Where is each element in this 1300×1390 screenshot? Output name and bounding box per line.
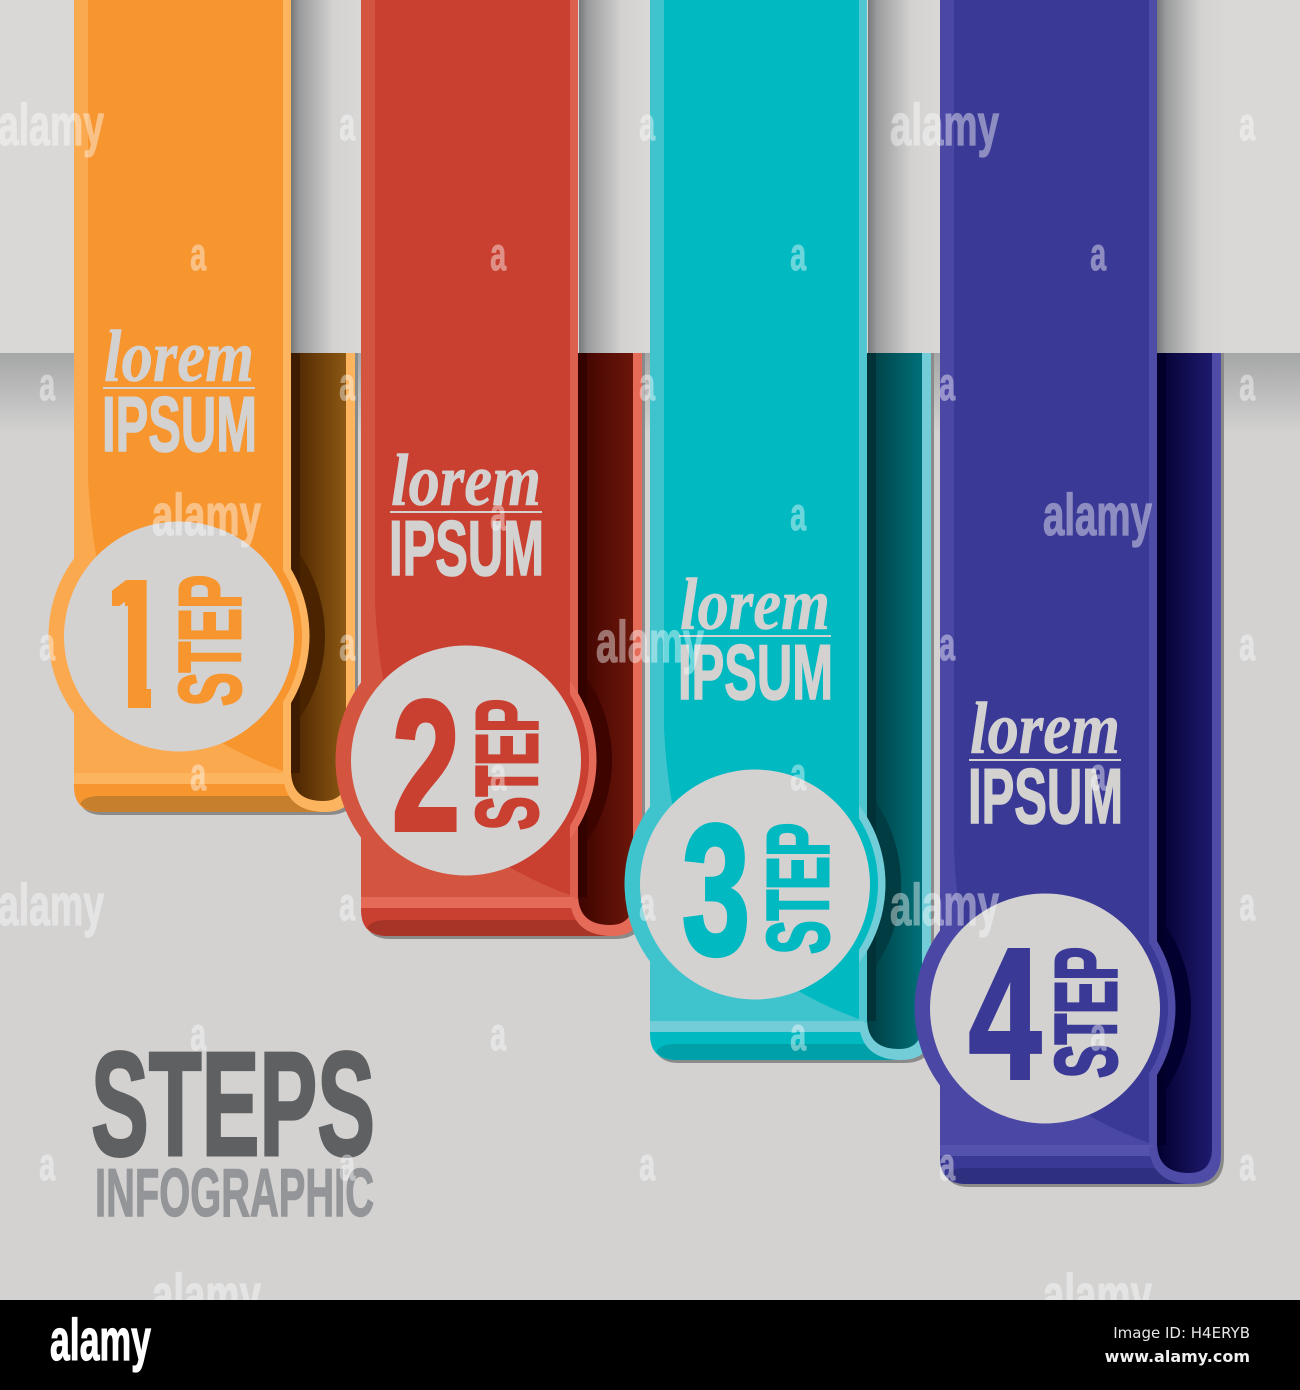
label: lorem ipsum 1: IPSUM: [102, 380, 257, 468]
footer bar: alamy: [50, 1308, 151, 1373]
watermark: alamy pattern: a: [1239, 99, 1256, 151]
watermark: alamy pattern: a: [639, 879, 656, 931]
watermark: alamy pattern: alamy: [596, 610, 704, 675]
watermark: alamy pattern: a: [639, 99, 656, 151]
badge: step 3: 3: [682, 786, 750, 994]
label: lorem ipsum 1: [102, 316, 257, 468]
watermark: alamy pattern: a: [1090, 749, 1107, 801]
badge: step 3: [640, 770, 870, 1000]
watermark: alamy pattern: a: [190, 229, 207, 281]
watermark: alamy pattern: a: [39, 359, 56, 411]
panel: step 4 ribbon: [899, 0, 1224, 1187]
watermark: alamy pattern: a: [639, 359, 656, 411]
label: lorem ipsum 4: IPSUM: [968, 752, 1123, 840]
watermark: alamy pattern: a: [639, 1139, 656, 1191]
watermark: alamy pattern: a: [790, 229, 807, 281]
watermark: alamy pattern: alamy: [1043, 483, 1152, 548]
badge: step 2: 2: [392, 662, 460, 870]
watermark: alamy pattern: a: [790, 749, 807, 801]
watermark: alamy pattern: a: [1239, 619, 1256, 671]
label: lorem ipsum 2: IPSUM: [389, 504, 544, 592]
watermark: alamy pattern: a: [1090, 1009, 1107, 1061]
watermark: alamy pattern: a: [490, 749, 507, 801]
label: lorem ipsum 3: [678, 564, 833, 716]
watermark: alamy pattern: a: [39, 619, 56, 671]
label: lorem ipsum 2: lorem: [391, 440, 541, 522]
watermark: alamy pattern: a: [1239, 1139, 1256, 1191]
title: steps infographic: [91, 1022, 375, 1231]
badge: step 4: [930, 894, 1160, 1124]
watermark: alamy pattern: a: [339, 619, 356, 671]
badge: step 3: STEP: [750, 823, 847, 954]
label: lorem ipsum 3: lorem: [680, 564, 830, 646]
watermark: alamy pattern: a: [1090, 229, 1107, 281]
watermark: alamy pattern: a: [490, 1009, 507, 1061]
watermark: alamy pattern: alamy: [152, 1263, 261, 1328]
footer bar: www.alamy.com: [1105, 1347, 1250, 1366]
footer bar: Image ID: H4ERYB: [1113, 1324, 1250, 1342]
watermark: alamy pattern: a: [339, 879, 356, 931]
panel: step 3 ribbon: [609, 0, 934, 1063]
panel: step 1 ribbon: [33, 0, 358, 815]
title: steps infographic: STEPS: [91, 1022, 375, 1187]
title: steps infographic: INFOGRAPHIC: [95, 1155, 374, 1231]
watermark: alamy pattern: a: [339, 99, 356, 151]
watermark: alamy pattern: alamy: [890, 873, 999, 938]
watermark: alamy pattern: alamy: [1043, 1263, 1152, 1328]
badge: step 4: 4: [969, 911, 1041, 1119]
badge: step 2: STEP: [459, 699, 556, 830]
badge: step 1: [64, 522, 294, 752]
watermark: alamy pattern: a: [39, 1139, 56, 1191]
label: lorem ipsum 2: [389, 440, 544, 592]
watermark: alamy pattern: a: [190, 749, 207, 801]
footer bar: [0, 1300, 1300, 1390]
watermark: alamy pattern: a: [939, 359, 956, 411]
panel: step 2 ribbon: [320, 0, 645, 939]
watermark: alamy pattern: alamy: [152, 483, 261, 548]
watermark: alamy pattern: a: [939, 1139, 956, 1191]
badge: step 4: STEP: [1038, 947, 1135, 1078]
label: lorem ipsum 3: IPSUM: [678, 628, 833, 716]
badge: step 2: [351, 646, 581, 876]
watermark: alamy pattern: a: [939, 619, 956, 671]
watermark: alamy pattern: a: [339, 359, 356, 411]
watermark: alamy pattern: alamy: [0, 873, 104, 938]
watermark: alamy pattern: alamy: [0, 93, 104, 158]
watermark: alamy pattern: a: [339, 1139, 356, 1191]
watermark: alamy pattern: a: [1239, 359, 1256, 411]
watermark: alamy pattern: a: [1239, 879, 1256, 931]
watermark: alamy pattern: a: [190, 1009, 207, 1061]
watermark: alamy pattern: a: [490, 489, 507, 541]
watermark: alamy pattern: a: [790, 489, 807, 541]
watermark: alamy pattern: alamy: [890, 93, 999, 158]
watermark: alamy pattern: a: [490, 229, 507, 281]
badge: step 1: STEP: [162, 575, 259, 706]
badge: step 1: 1: [88, 540, 176, 748]
label: lorem ipsum 1: lorem: [104, 316, 254, 398]
watermark: alamy pattern: a: [790, 1009, 807, 1061]
label: lorem ipsum 4: [968, 688, 1123, 840]
label: lorem ipsum 4: lorem: [970, 688, 1120, 770]
